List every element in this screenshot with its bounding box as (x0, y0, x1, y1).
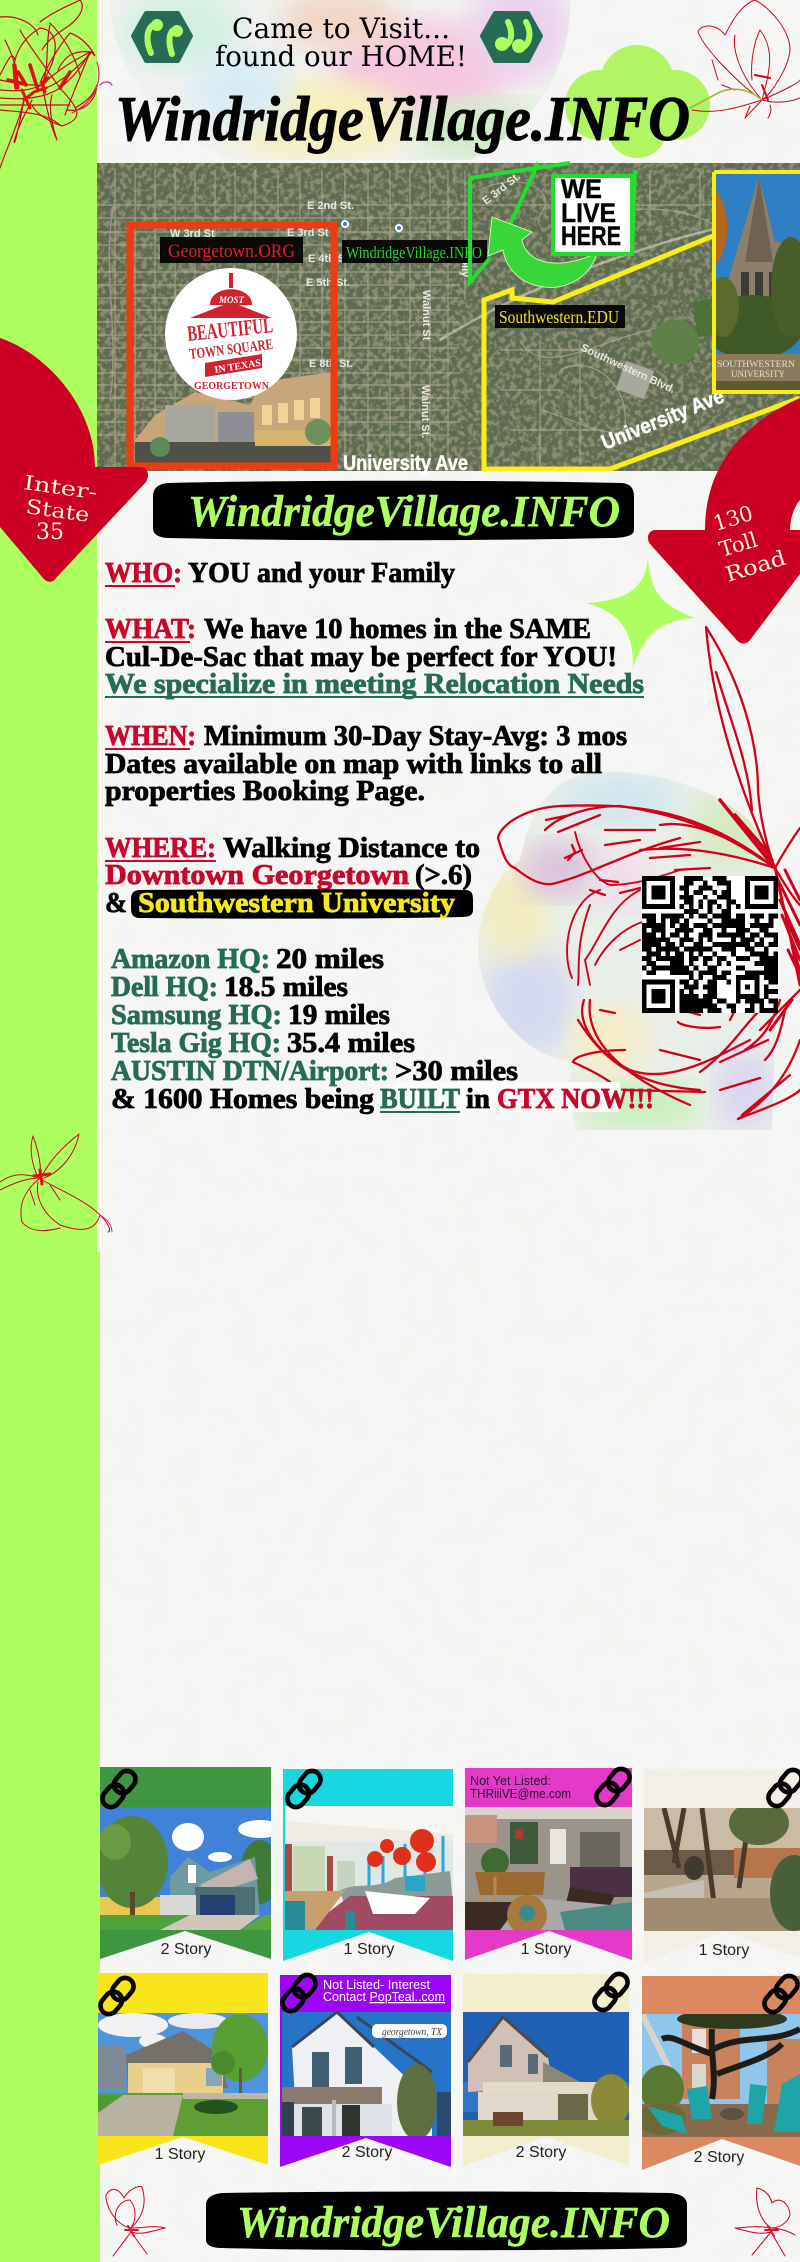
photo: patio and oak (642, 2014, 800, 2137)
label: Southwestern.EDU: Southwestern.EDU (499, 307, 619, 327)
copy: what (105, 614, 644, 700)
card note: not listed: Not Listed- Interest (323, 1977, 430, 1992)
map: yellow Southwestern outline (484, 236, 800, 469)
flower sketch: top left (0, 0, 112, 168)
copy: what: WHAT: (105, 614, 196, 645)
left green sidebar (0, 0, 100, 2262)
arrow: Interstate 35: Inter- (22, 470, 99, 504)
distance list: AUSTIN DTN/Airport: (111, 1056, 389, 1087)
map: WindridgeVillage.INFO label: WindridgeVillage.INFO (346, 243, 482, 262)
map: green neighbourhood outline (470, 163, 635, 282)
photo: backyard (644, 1808, 800, 1931)
copy: where: Walking Distance to (223, 833, 480, 864)
map street names: E 2nd St. (307, 200, 354, 212)
map street names: W 3rd St (170, 228, 215, 240)
card: 2 Story beige: 2 Story (516, 2144, 566, 2161)
distance list: Dell HQ: (111, 972, 218, 1003)
photo: poppy living room (285, 1806, 453, 1930)
card note: not yet listed (470, 1773, 571, 1801)
map street names: E 8th St. (309, 358, 353, 370)
card note: not yet listed: Not Yet Listed: (470, 1773, 551, 1788)
map: curved green arrow (488, 217, 597, 287)
arrow: Interstate 35 (0, 338, 148, 582)
copy: when (105, 721, 627, 807)
iridescent blob behind QR (470, 765, 780, 1135)
copy: what: We have 10 homes in the SAME (204, 614, 591, 645)
card: 1 Story magenta: 1 Story (521, 1941, 571, 1958)
distance list: in (466, 1084, 490, 1115)
distance list: 19 miles (288, 1000, 390, 1031)
map street names: Walnut St. (419, 385, 431, 438)
card: 1 Story cyan: 1 Story (344, 1941, 394, 1958)
copy: when: Dates available on map with links to all (105, 749, 602, 780)
card: 2 Story purple: 2 Story (342, 2144, 392, 2161)
header tagline (215, 12, 467, 73)
photo: Southwestern University: UNIVERSITY (731, 369, 785, 379)
icon: link (761, 1972, 800, 2016)
copy: when: properties Booking Page. (105, 776, 425, 807)
we live here sign: HERE (561, 221, 621, 251)
distance list: 35.4 miles (287, 1028, 415, 1059)
distance list: GTX NOW!!! (497, 1084, 654, 1115)
map street names: Southwestern Blvd. (579, 342, 677, 396)
aerial map (97, 163, 800, 471)
photo: blue house (100, 1807, 271, 1930)
copy: what: Cul-De-Sac that may be perfect for YOU! (105, 642, 617, 673)
distance list: 20 miles (276, 944, 384, 975)
arrow: 130 Toll Road: 130 (710, 501, 756, 536)
flower sketch: bottom right (735, 2188, 795, 2256)
iridescent blob behind header (100, 0, 580, 170)
map street names: E 4th St (308, 253, 349, 265)
copy: who: WHO: (105, 558, 182, 589)
logo: most beautiful town square: TOWN SQUARE (189, 337, 274, 363)
arrow: Interstate 35: 35 (36, 520, 64, 545)
arrow: 130 Toll Road: Toll (716, 528, 761, 562)
storefront illustration (135, 372, 332, 465)
card: 2 Story green: 2 Story (161, 1941, 211, 1958)
map street names: Walnut St (420, 290, 432, 341)
map: university ave labels (343, 385, 727, 475)
card: 1 Story cream (644, 1766, 800, 1963)
logo: most beautiful town square: IN TEXAS (214, 358, 262, 376)
icon: link (765, 1766, 800, 1810)
icon: link (593, 1765, 633, 1809)
arrow: 130 Toll Road (648, 398, 800, 644)
map sports fields (651, 320, 699, 364)
logo: most beautiful town square (165, 268, 297, 400)
card: 2 Story green (96, 1767, 282, 1959)
photo: white two-storey: georgetown, TX (382, 2027, 443, 2038)
map: university ave labels: University Ave (343, 452, 468, 475)
copy: when: WHEN: (105, 721, 196, 752)
map streets (97, 170, 712, 470)
top site banner: WindridgeVillage.INFO (188, 487, 620, 536)
photo: dining and lounge (465, 1807, 632, 1930)
distance list: Samsung HQ: (111, 1000, 282, 1031)
map street names (170, 170, 677, 438)
we live here sign: LIVE (561, 198, 616, 228)
green clover (565, 45, 710, 158)
card: 1 Story cream: 1 Story (699, 1942, 749, 1959)
distance list: BUILT (380, 1084, 460, 1115)
map street names: S Holly (459, 240, 471, 278)
map pins (341, 220, 349, 228)
logo: most beautiful town square: BEAUTIFUL (186, 312, 274, 346)
we live here sign (553, 174, 632, 254)
copy: where: WHERE: (105, 833, 216, 864)
main title: WindridgeVillage.INFO (115, 83, 690, 154)
distance list: Tesla Gig HQ: (111, 1028, 281, 1059)
card: 2 Story purple (279, 1971, 451, 2167)
copy: where: & (105, 888, 127, 919)
copy: when: Minimum 30-Day Stay-Avg: 3 mos (204, 721, 627, 752)
map street names: E 3rd St (287, 227, 329, 239)
copy: what: We specialize in meeting Relocation Needs (105, 669, 644, 700)
photo: yellow bungalow (98, 2013, 268, 2136)
icon: link (284, 1767, 324, 1811)
map: university ave labels: University Ave (598, 385, 727, 455)
card: 1 Story yellow (97, 1973, 268, 2165)
card: 2 Story beige (463, 1970, 631, 2166)
logo: most beautiful town square: GEORGETOWN (194, 380, 269, 392)
flower sketch: on sidebar (0, 1134, 112, 1232)
card: 2 Story terracotta: 2 Story (694, 2149, 744, 2166)
card: 2 Story terracotta (638, 1972, 800, 2170)
distance list: Amazon HQ: (111, 944, 270, 975)
logo: most beautiful town square: MOST (218, 295, 245, 305)
card note: not listed (323, 1977, 445, 2004)
QR code (642, 876, 778, 1013)
copy: where (105, 833, 480, 919)
icon: link (279, 1971, 319, 2015)
photo: white two-storey (282, 2012, 451, 2136)
green four-point star (587, 558, 695, 668)
distance list (111, 944, 654, 1115)
header icon: right quote mark (482, 13, 541, 61)
bottom site banner: WindridgeVillage.INFO (237, 2198, 670, 2247)
icon: link (591, 1970, 631, 2014)
large red flower sketch (498, 627, 800, 1119)
header tagline: found our HOME! (215, 40, 467, 73)
map street names: E 5th St. (306, 277, 350, 289)
distance list: >30 miles (395, 1056, 518, 1087)
label: Georgetown.ORG: Georgetown.ORG (168, 241, 295, 262)
copy: where: (>.6) (415, 860, 472, 891)
arrow: 130 Toll Road: Road (722, 546, 789, 587)
photo: Southwestern University (716, 174, 800, 390)
distance list: 18.5 miles (224, 972, 348, 1003)
flower sketch: top right (690, 0, 800, 118)
card: 1 Story magenta (465, 1765, 633, 1960)
card note: not listed: Contact PopTeal..com (323, 1989, 445, 2004)
card: 1 Story cyan (283, 1767, 453, 1961)
photo: beige two-storey (463, 2012, 629, 2136)
icon: link (97, 1974, 137, 2018)
map street names: E 3rd St. (480, 170, 523, 207)
copy: where: Southwestern University (138, 888, 455, 919)
distance list: & 1600 Homes being (111, 1084, 374, 1115)
arrow: Interstate 35: State (24, 494, 91, 527)
photo: Southwestern University: SOUTHWESTERN (717, 359, 796, 369)
header tagline: Came to Visit... (232, 12, 450, 45)
copy: where: Downtown Georgetown (105, 860, 409, 891)
we live here sign: WE (561, 174, 602, 204)
card: 1 Story yellow: 1 Story (155, 2146, 205, 2163)
copy: who: YOU and your Family (188, 558, 455, 589)
icon: link (99, 1767, 139, 1811)
card note: not yet listed: THRiiiVE@me.com (470, 1786, 571, 1801)
header icon: left quote mark (133, 13, 191, 61)
map: red Georgetown frame (130, 225, 334, 466)
flower sketch: bottom left (106, 2187, 165, 2256)
